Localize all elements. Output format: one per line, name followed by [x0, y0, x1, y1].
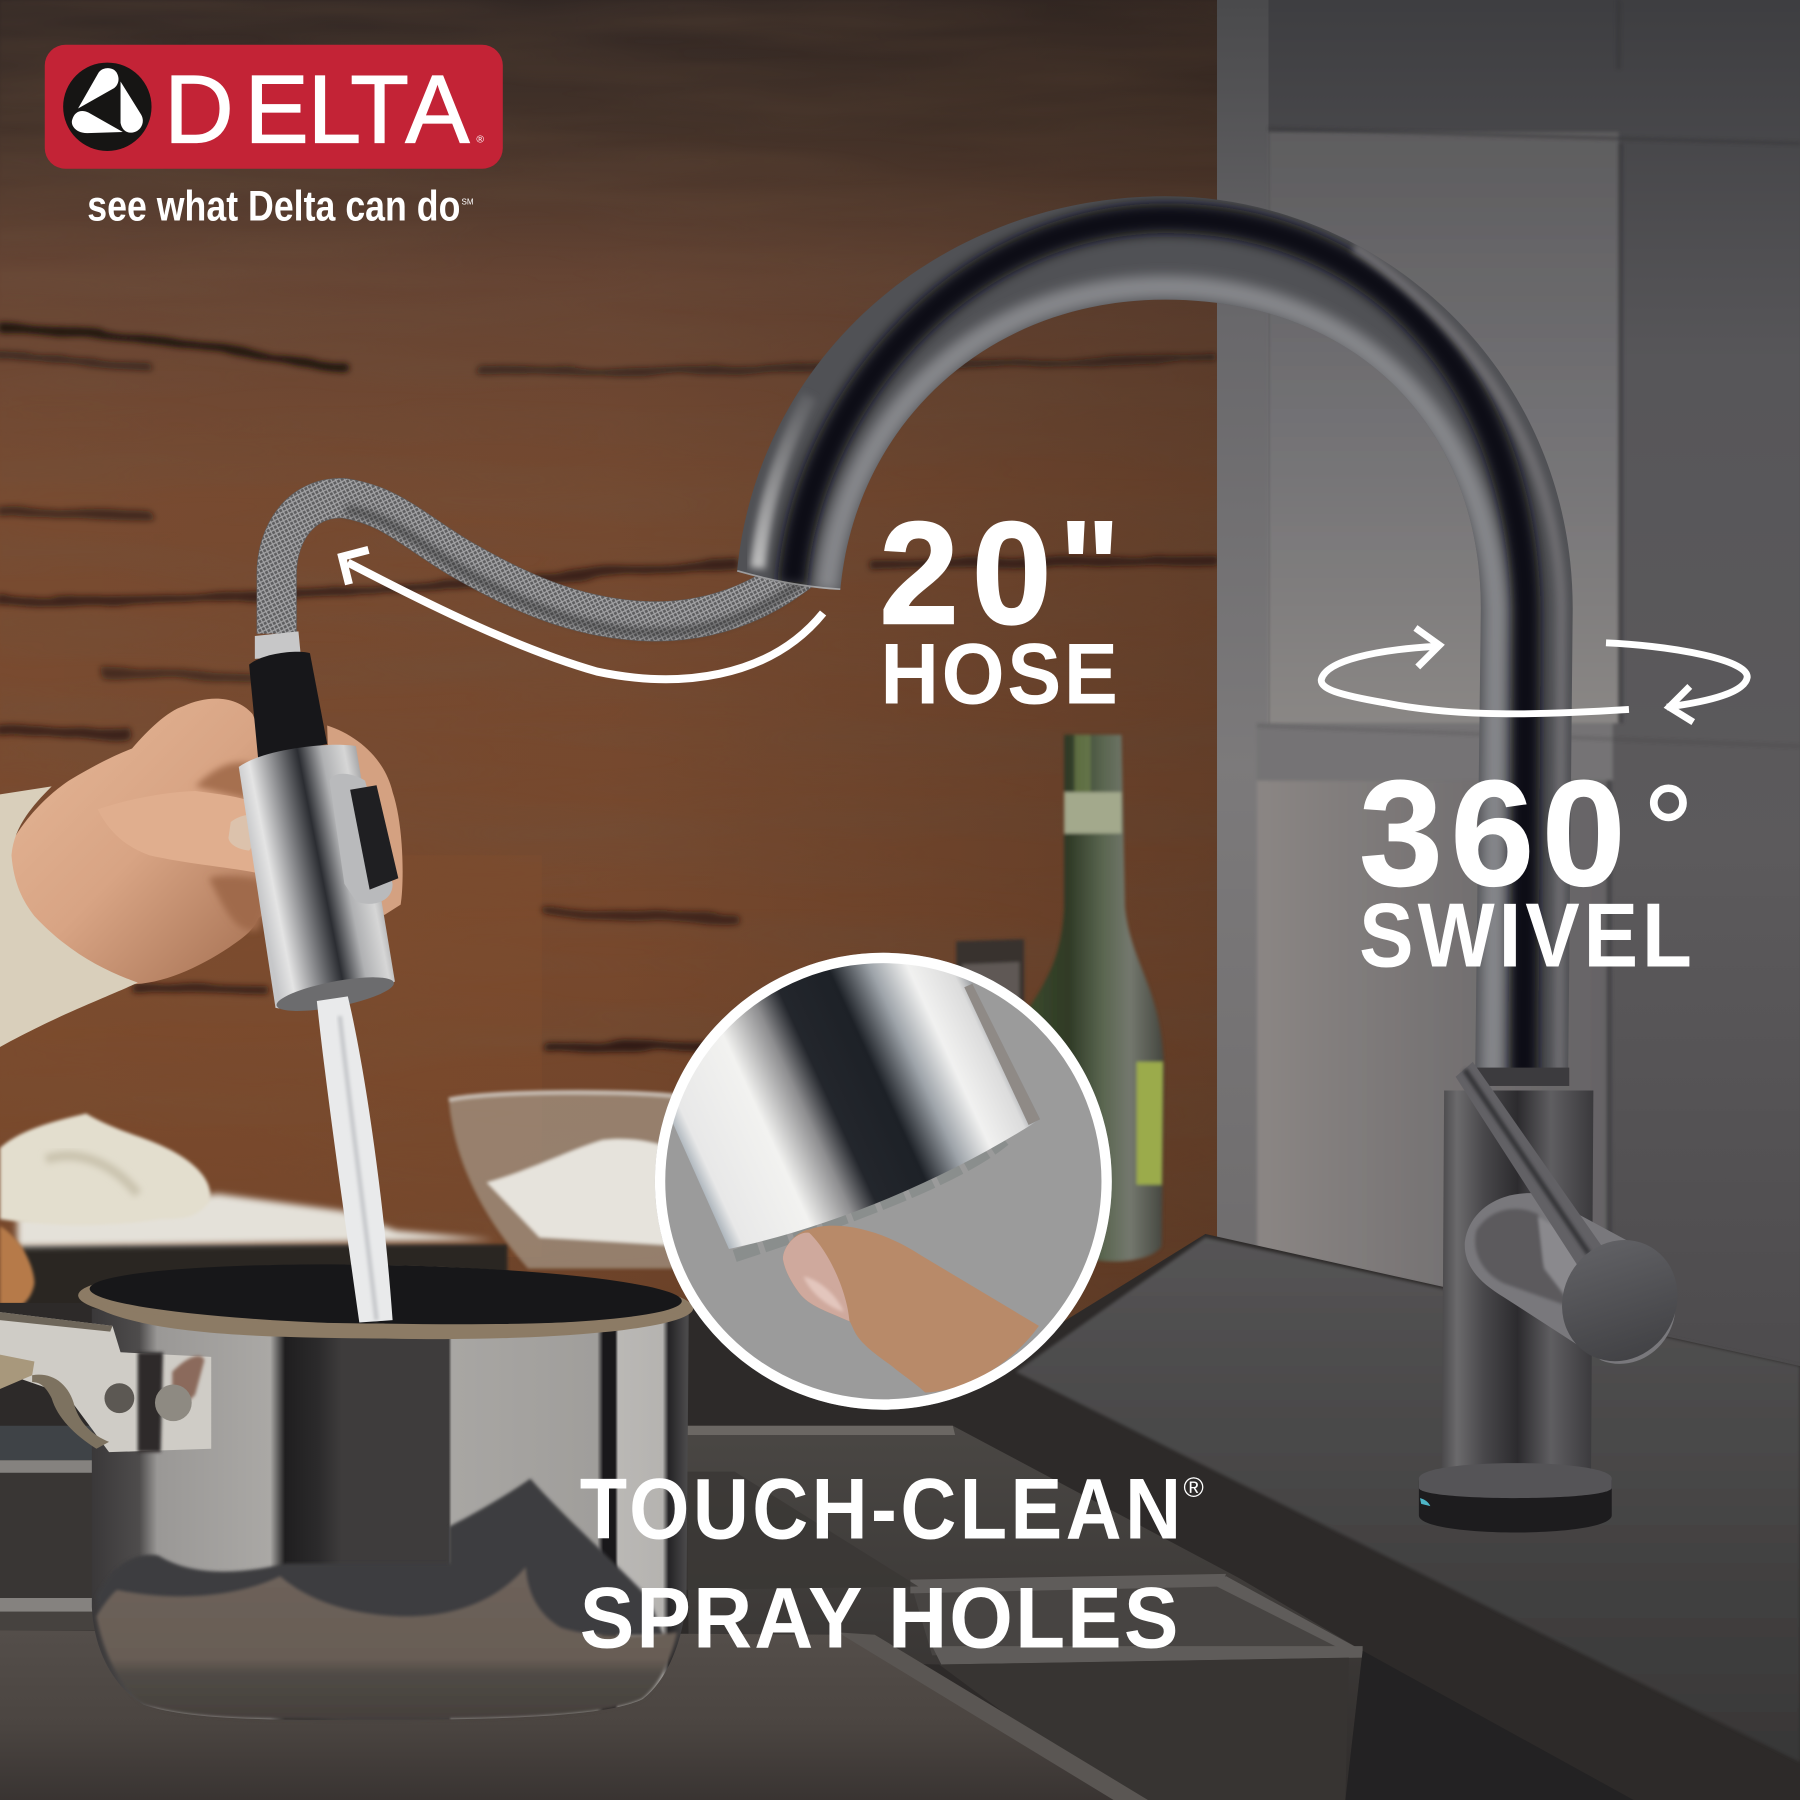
swivel arrows	[1321, 628, 1747, 722]
spray holes callout	[580, 1462, 1204, 1666]
faucet base and handle	[1419, 1062, 1699, 1533]
Delta logo: DELTA	[164, 56, 470, 163]
hose callout: HOSE	[880, 625, 1118, 722]
swivel callout: 360	[1359, 749, 1626, 917]
spray holes callout: TOUCH-CLEAN	[580, 1462, 1181, 1557]
cooking pot	[0, 1259, 694, 1720]
faucet spout	[737, 196, 1573, 1079]
dark reflection	[96, 1479, 664, 1636]
pot front rim	[80, 1297, 693, 1339]
spray nubs	[735, 1140, 1004, 1256]
hose callout: 20	[879, 491, 1051, 655]
swivel callout	[1359, 749, 1694, 987]
Delta logo	[45, 45, 503, 169]
shadow between thumb and fingers	[195, 762, 271, 804]
fingers behind sprayer	[327, 726, 403, 915]
pull-down hose	[277, 498, 805, 634]
logo emblem	[63, 63, 152, 151]
fingertip	[783, 1226, 1039, 1392]
chrome sprayer head	[673, 963, 1035, 1249]
pot rim	[77, 1259, 694, 1345]
wood backsplash	[0, 0, 1219, 1378]
thumb	[98, 791, 281, 873]
knit sleeve	[0, 786, 138, 1047]
tagline: see what Delta can do	[87, 183, 460, 230]
hose callout: "	[1058, 492, 1121, 640]
pull-down spray head	[239, 631, 398, 1018]
thumbnail	[228, 815, 263, 851]
hose callout	[879, 491, 1121, 722]
hose length arrow	[342, 550, 823, 679]
wine bottle and jar	[956, 735, 1164, 1261]
counter reflection	[96, 1567, 677, 1720]
palm	[7, 699, 287, 984]
fingernail	[783, 1233, 849, 1321]
spray holes callout: SPRAY HOLES	[580, 1569, 1178, 1666]
tagline: SM	[461, 197, 474, 206]
inset circle: touch-clean spray holes	[643, 918, 1112, 1410]
dough on tray	[0, 1114, 507, 1313]
cabinet wall	[1217, 0, 1800, 1423]
pot handle	[0, 1312, 211, 1452]
water stream	[317, 996, 393, 1322]
counter and sink	[0, 1234, 1800, 1800]
hand and sleeve	[0, 699, 403, 1047]
swivel callout: SWIVEL	[1359, 886, 1692, 987]
Delta logo: ®	[476, 134, 484, 145]
spray holes callout: ®	[1184, 1472, 1204, 1503]
swivel callout: °	[1643, 760, 1694, 903]
glass bowl with flour	[449, 1092, 677, 1268]
